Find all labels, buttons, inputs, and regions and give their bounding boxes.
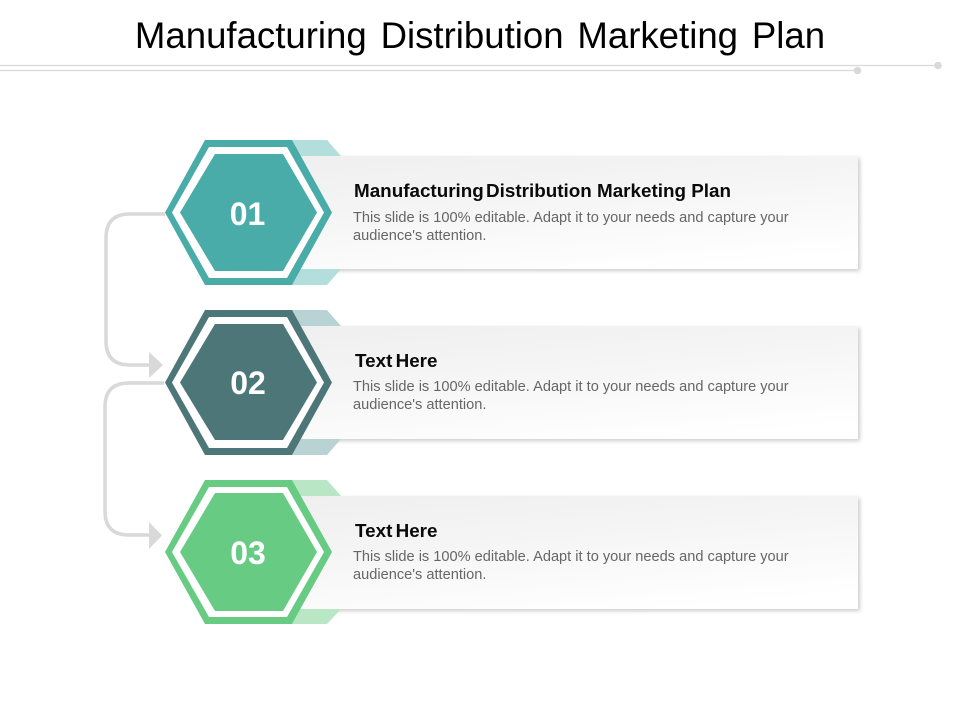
step 2 body text	[353, 379, 789, 413]
hexagon 03	[165, 480, 341, 624]
panel: step 1 text card	[300, 156, 858, 269]
arrow: connector 01 to 02	[106, 214, 165, 378]
step 1 body text	[353, 210, 789, 244]
step 1 body text: This slide is 100% editable. Adapt it to your needs and capture your	[353, 210, 789, 226]
step 2 body text: This slide is 100% editable. Adapt it to your needs and capture your	[353, 379, 789, 395]
step 1 heading: Manufacturing Distribution Marketing Plan	[354, 180, 731, 201]
step 3 body text: This slide is 100% editable. Adapt it to your needs and capture your	[353, 549, 789, 565]
arrow: connector 02 to 03	[105, 383, 164, 549]
panel: step 2 text card	[300, 326, 858, 439]
panel: step 3 text card	[300, 496, 858, 609]
number 02: 02	[230, 365, 266, 401]
step 2 body text: audience's attention.	[353, 397, 486, 413]
number 03: 03	[230, 535, 266, 571]
step 2 heading: Text Here	[355, 350, 437, 371]
step 3 body text	[353, 549, 789, 583]
step 3 heading: Text Here	[355, 520, 437, 541]
step 1 body text: audience's attention.	[353, 228, 486, 244]
step 3 body text: audience's attention.	[353, 567, 486, 583]
hexagon 02	[165, 310, 341, 455]
title: Manufacturing Distribution Marketing Plan	[135, 15, 825, 56]
number 01: 01	[230, 196, 265, 232]
hexagon 01	[165, 140, 341, 285]
